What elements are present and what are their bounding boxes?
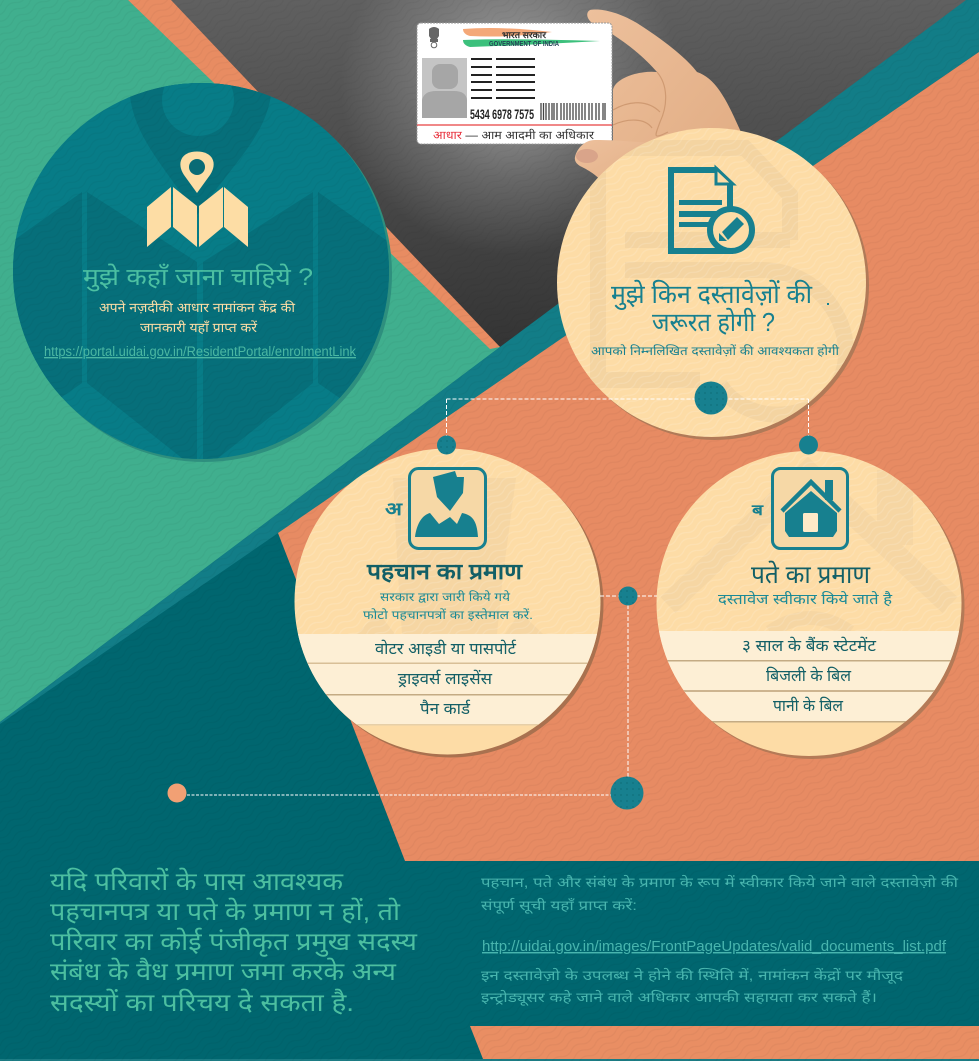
description: जानकारी यहाँ प्राप्त करें [140,320,258,335]
icon: national emblem [429,27,439,48]
description: दस्तावेज स्वीकार किये जाते है [718,591,892,608]
redacted details [471,58,535,99]
list: address documents: बिजली के बिल [766,666,852,685]
text block: family introduction note: पहचानपत्र या पते के प्रमाण न हों, तो [50,897,401,926]
red rule [417,124,612,126]
text block: family introduction note [50,867,418,1017]
text block: family introduction note: सदस्यों का परिचय दे सकता है. [50,988,354,1017]
text block: full document list: पहचान, पते और संबंध के प्रमाण के रूप में स्वीकार किये जाने वाले दस्तावेज़ो की [481,874,959,890]
text block: full document list: संपूर्ण सूची यहाँ प्राप्त करें: [481,897,637,914]
icon: hand holding the card [587,10,752,210]
icon: map pin [147,152,248,247]
panel: proof of identity [294,448,604,758]
heading: जरूरत होगी ? [652,307,775,337]
description [99,300,296,335]
text block: family introduction note: संबंध के वैध प्रमाण जमा करके अन्य [50,957,397,986]
stray dot [827,303,829,305]
connectors: dashed lines [187,399,808,795]
subheading: आपको निम्नलिखित दस्तावेज़ों की आवश्यकता होगी [591,344,840,358]
label: ब: ब [751,502,765,519]
card header text [489,30,559,48]
icon: person [410,468,486,548]
document watermark [557,128,866,437]
barcode [541,103,605,120]
icon: house [772,468,848,548]
list: address documents [657,631,962,722]
heading: मुझे कहाँ जाना चाहिये ? [83,263,313,292]
text block: full document list: इन दस्तावेज़ो के उपलब्ध ने होने की स्थिति में, नामांकन केंद्रों पर मौजूद [481,967,904,984]
icon: thumb [575,140,690,200]
text block: full document list [481,874,959,1006]
list: identity documents: वोटर आइडी या पासपोर्ट [375,639,517,658]
map and pin watermark [13,83,389,459]
heading: मुझे किन दस्तावेज़ों की [611,279,813,310]
label: अ: अ [385,499,404,519]
description: फोटो पहचानपत्रों का इस्तेमाल करें. [363,608,533,622]
panel: proof of address [656,451,964,759]
list: identity documents: ड्राइवर्स लाइसेंस [397,669,493,688]
panel: where should I go [13,83,392,462]
text block: family introduction note: यदि परिवारों के पास आवश्यक [50,867,344,896]
icon: document with pencil [671,168,752,251]
heading [611,279,813,337]
heading: पते का प्रमाण [751,560,871,589]
aadhaar number: 5434 6978 7575 [470,106,534,122]
person watermark [357,478,543,634]
description: सरकार द्वारा जारी किये गये [380,590,511,604]
list: address documents: पानी के बिल [773,696,844,715]
heading: पहचान का प्रमाण [366,559,523,584]
text block: full document list: इन्ट्रोड्यूसर कहे जाने वाले अधिकार आपकी सहायता कर सकते हैं। [481,989,877,1006]
link: https://portal.uidai.gov.in/ResidentPortal/enrolmentLink [44,344,356,359]
description: अपने नज़दीकी आधार नामांकन केंद्र की [99,300,296,315]
list: identity documents: पैन कार्ड [420,699,471,718]
house watermark [883,470,913,492]
list: identity documents [295,634,601,726]
card tagline: आधार — आम आदमी का अधिकार [433,128,594,142]
text block: family introduction note: परिवार का कोई पंजीकृत प्रमुख सदस्य [50,927,418,957]
panel: which documents [557,128,869,440]
connector nodes [168,382,818,810]
photo placeholder [422,58,467,118]
tricolour swooshes [463,28,600,47]
card header text: GOVERNMENT OF INDIA [489,39,559,48]
description [363,590,533,622]
list: address documents: ३ साल के बैंक स्टेटमेंट [742,636,877,655]
link: valid documents: http://uidai.gov.in/images/FrontPageUpdates/valid_documents_list.pdf [482,939,947,955]
aadhaar card [417,23,612,144]
card header text: भारत सरकार [502,30,546,40]
